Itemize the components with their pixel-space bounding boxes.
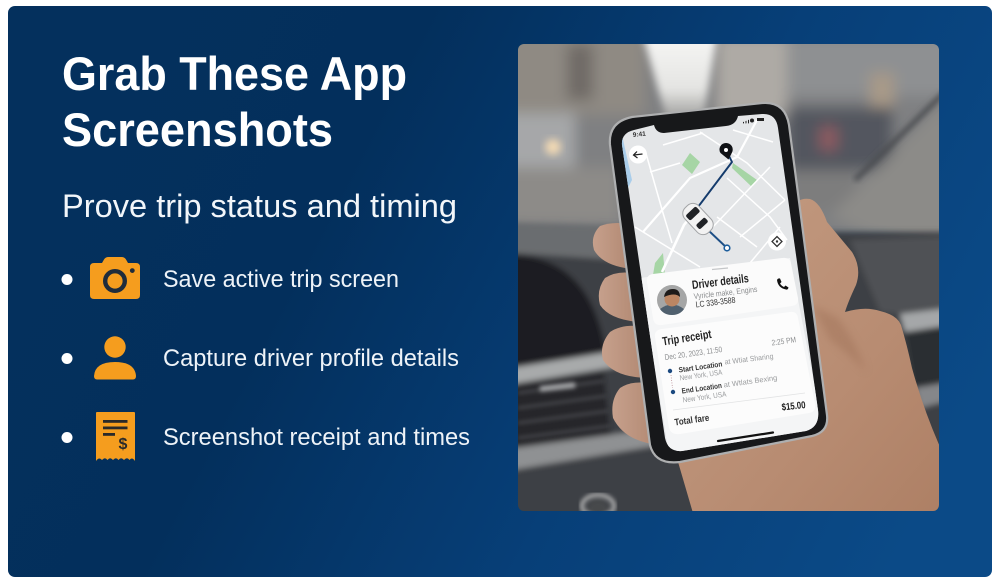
icon: camera <box>90 257 140 299</box>
trip receipt card: Start Location <box>678 359 723 374</box>
phone body <box>610 103 827 462</box>
driver details card: Vyricle make, Engins <box>693 285 758 301</box>
air vent slats <box>518 381 610 438</box>
title: Screenshots <box>62 104 333 157</box>
locate button <box>768 232 786 250</box>
trip receipt card: 2:25 PM <box>771 335 797 347</box>
trip start and end markers <box>668 369 675 394</box>
trip receipt card: Trip receipt <box>661 327 712 348</box>
title: Grab These App <box>62 48 407 101</box>
trip receipt card <box>655 312 815 434</box>
list item: save active trip screen <box>62 257 399 299</box>
trip receipt card: New York, USA <box>682 389 727 404</box>
bullet <box>62 432 72 443</box>
trip receipt card: New York, USA <box>679 368 723 382</box>
list item: capture driver profile details <box>62 336 459 380</box>
phone screen <box>622 114 818 452</box>
trip receipt card: $15.00 <box>781 400 807 413</box>
label: Capture driver profile details <box>163 345 459 372</box>
phone <box>610 100 830 465</box>
trip receipt card: at Wtiat Sharing <box>724 352 774 366</box>
trip receipt card: End Location <box>681 381 723 395</box>
label: Save active trip screen <box>163 266 399 293</box>
driver details card: LC 338-3588 <box>695 295 736 309</box>
thumb crease shadow <box>818 310 858 358</box>
blurred street background <box>518 44 939 236</box>
home indicator <box>718 432 773 441</box>
pickup marker <box>724 245 730 251</box>
trip receipt card: Dec 20, 2023, 11:50 <box>664 345 723 362</box>
photo: hand holding phone in car <box>518 44 939 511</box>
status bar <box>632 118 764 139</box>
icon: receipt <box>96 412 135 461</box>
driver details card <box>647 258 798 325</box>
fingers <box>592 223 648 444</box>
status bar: 9:41 <box>632 131 647 139</box>
car marker <box>679 200 717 238</box>
route line <box>698 150 732 248</box>
destination pin <box>719 143 733 160</box>
label: Screenshot receipt and times <box>163 424 470 451</box>
trip receipt card: at Wtlats Bexing <box>723 373 778 389</box>
hand palm and thumb <box>676 199 945 520</box>
blurred dashboard <box>518 221 939 511</box>
bullet <box>62 353 72 364</box>
list item: screenshot receipt and times <box>62 412 470 461</box>
back button <box>629 146 647 164</box>
driver avatar <box>657 285 687 315</box>
sky glow <box>640 44 720 112</box>
title <box>62 48 407 157</box>
driver details card: Driver details <box>691 271 750 292</box>
subtitle: Prove trip status and timing <box>62 188 457 224</box>
bullet <box>62 274 72 285</box>
icon: phone handset <box>777 278 788 290</box>
icon: receipt: $ <box>119 436 128 453</box>
icon: person <box>94 336 136 380</box>
dashboard knob <box>582 495 614 517</box>
bottom sheet <box>640 258 825 460</box>
windshield pillar edge <box>855 92 945 180</box>
car headlight <box>545 139 561 155</box>
map <box>620 120 787 275</box>
trip receipt card: Total fare <box>674 413 710 428</box>
